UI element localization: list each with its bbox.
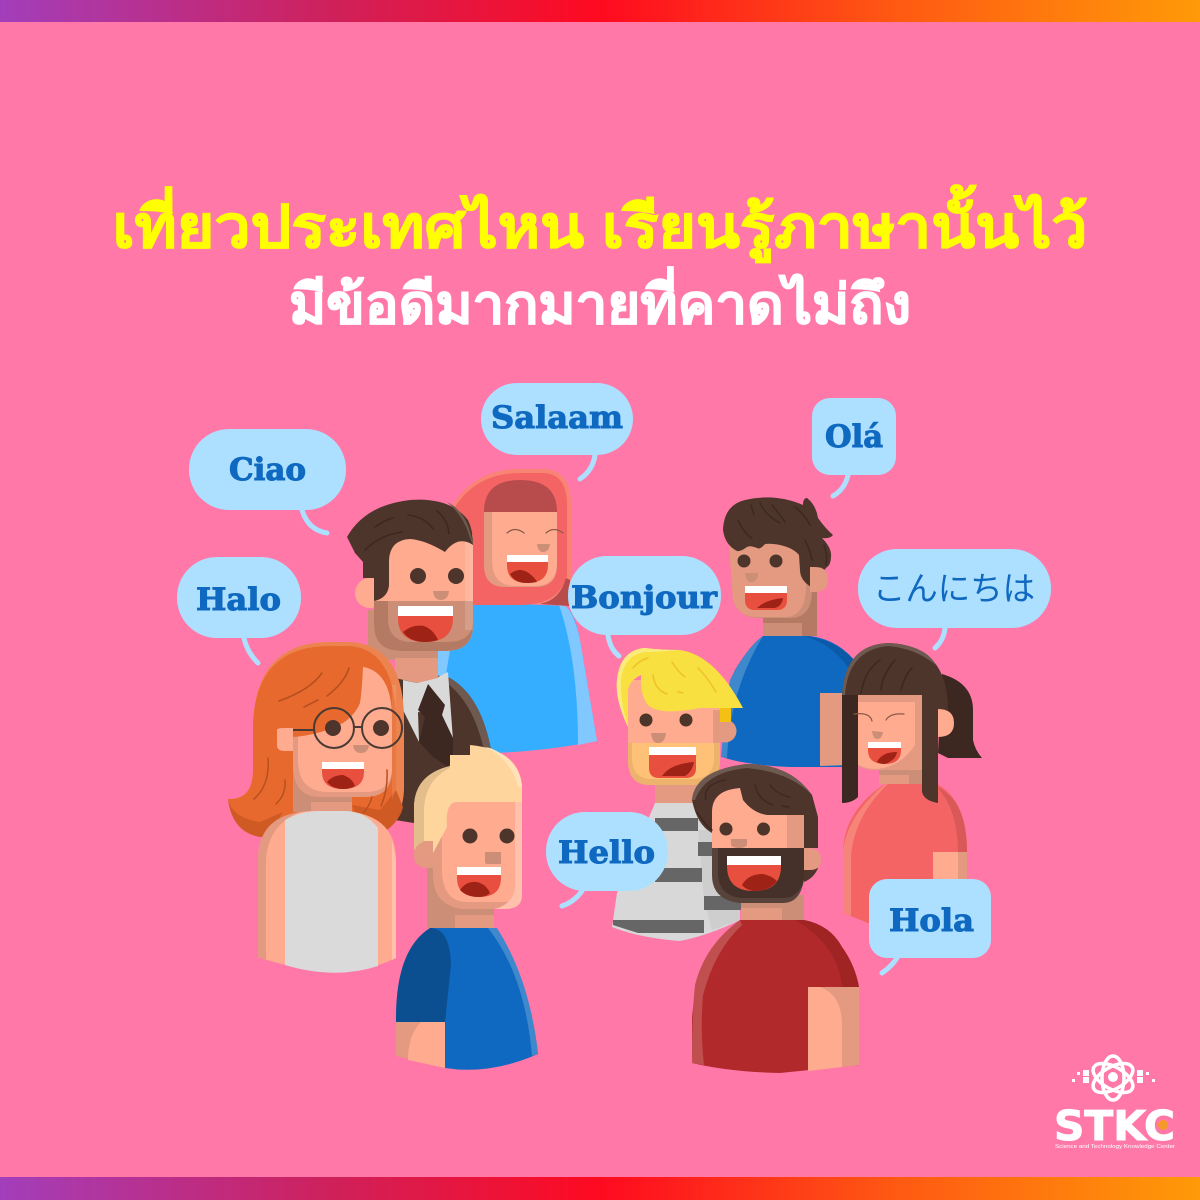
speech bubble: Halo [177,557,301,663]
person: man with yellow hair and striped shirt [612,648,743,941]
speech bubble: Olá: Olá [825,419,883,455]
speech bubble: Ciao: Ciao [229,452,306,488]
speech bubble: Salaam: Salaam [491,400,623,436]
title: เที่ยวประเทศไหน เรียนรู้ภาษานั้นไว้ [112,185,1088,263]
logo: STKC [1054,1056,1175,1150]
person: bearded man in red shirt [692,764,859,1073]
title [112,185,1088,335]
logo tagline: Science and Technology Knowledge Center [1055,1144,1175,1150]
speech bubble: Hola [869,879,991,973]
person: woman in hijab [435,469,597,753]
subtitle: มีข้อดีมากมายที่คาดไม่ถึง [289,266,911,335]
person: man in suit [347,500,500,830]
speech bubble: Salaam [481,383,633,479]
person: woman with red hair and glasses [228,642,404,973]
speech bubble: Bonjour: Bonjour [571,580,718,616]
speech bubble: Olá [812,398,896,496]
bottom gradient bar [0,1177,1200,1200]
person: young man in blue shirt [721,497,858,767]
logo dot [1158,1120,1168,1130]
speech bubble: Bonjour [568,556,721,656]
top gradient bar [0,0,1200,22]
person: woman with ponytail [842,643,982,935]
speech bubble: Hola: Hola [889,903,974,939]
speech bubble: こんにちは [858,549,1051,648]
speech bubble: こんにちは: こんにちは [873,570,1035,607]
person: blond man in blue shirt [396,745,538,1070]
speech bubble: Ciao [189,429,346,533]
speech bubble: Hello [546,812,668,906]
speech bubble: Halo: Halo [196,582,281,618]
icon: atom [1072,1056,1155,1100]
logo wordmark: STKC [1054,1102,1175,1150]
speech bubble: Hello: Hello [558,835,655,871]
